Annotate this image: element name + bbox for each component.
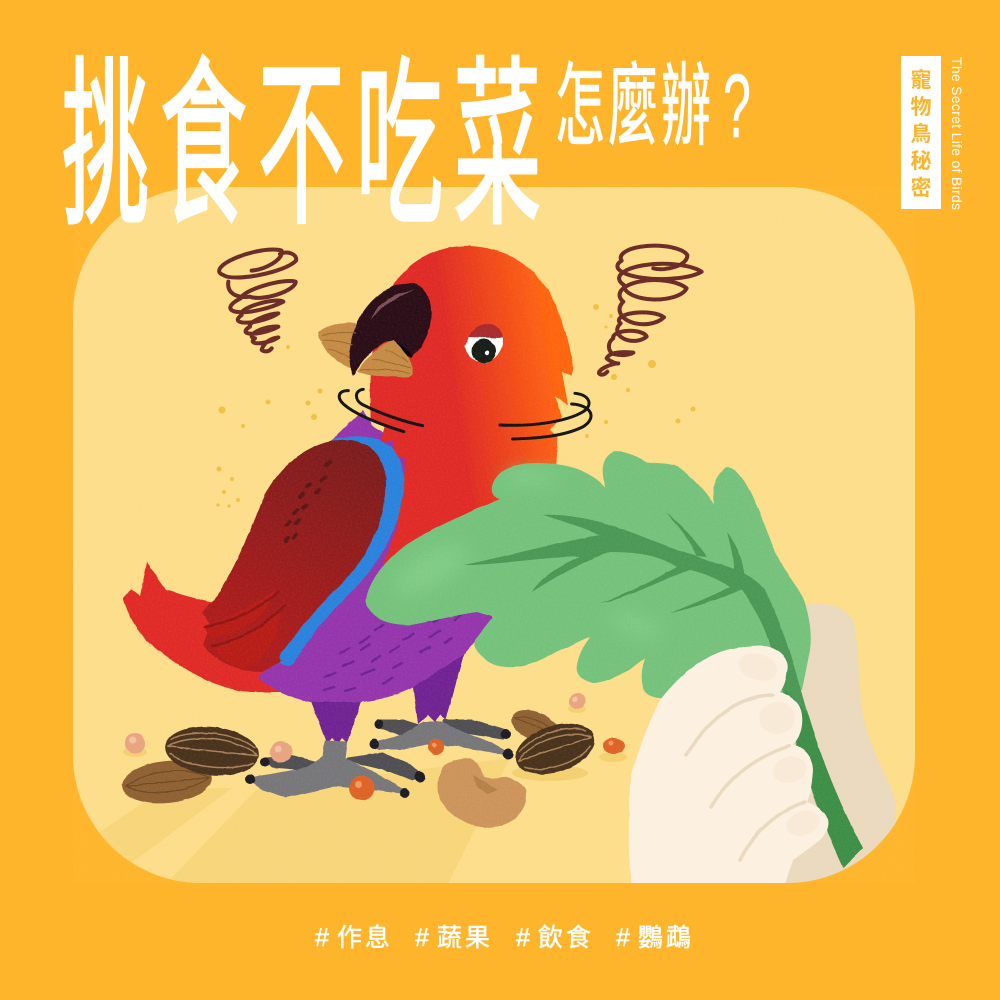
- hashtag: fruits and vegetables: #蔬果: [415, 924, 493, 952]
- wing spots: [286, 462, 330, 541]
- leaf highlights: [385, 469, 665, 644]
- beak highlight: [370, 290, 414, 320]
- finger creases: [686, 695, 805, 860]
- pink pea left: [125, 733, 145, 753]
- series tag box: 秘: [910, 150, 932, 173]
- series tag box: 鳥: [910, 123, 932, 146]
- spiral left: [219, 250, 296, 351]
- dark cocoa left: [165, 726, 259, 776]
- question mark: ?: [723, 57, 751, 157]
- head shake motion lines: [339, 389, 591, 439]
- mouth: [394, 341, 414, 358]
- spiral right: [599, 246, 702, 375]
- blue wing edge: [287, 445, 395, 657]
- nuts and seeds: [120, 693, 625, 827]
- parrot head and chest: [370, 246, 573, 565]
- orange pea under right foot: [428, 739, 444, 755]
- hashtag: rest: #作息: [315, 924, 393, 952]
- brown seed left: [122, 760, 212, 804]
- leaf stem and veins: [464, 512, 863, 868]
- hashtag: diet: #飲食: [516, 924, 594, 952]
- title: 挑食不吃菜: [62, 45, 552, 246]
- fingernails: [735, 649, 823, 840]
- series English name: The Secret Life of Birds: [949, 57, 965, 210]
- parrot legs: [310, 650, 465, 745]
- dark cocoa right: [515, 724, 594, 775]
- series tag box: 寵: [910, 69, 932, 92]
- panel: illustration background: [73, 187, 915, 883]
- parrot foot: right: [369, 720, 514, 760]
- cashew: [438, 758, 526, 827]
- spirals over the head: [219, 246, 702, 375]
- almond lines: [322, 332, 411, 373]
- orange pea right: [603, 738, 625, 754]
- parrot foot: left: [245, 742, 426, 798]
- wing feather lines: [205, 592, 285, 646]
- back of hand: [775, 604, 900, 890]
- parrot wing: [202, 440, 386, 672]
- hashtag: parrots: #鸚鵡: [616, 924, 694, 952]
- paper grain texture: [73, 187, 915, 883]
- parrot tail: [123, 562, 280, 692]
- belly feather marks: [324, 615, 461, 691]
- almond in beak, back half: [318, 323, 360, 368]
- subtitle characters: 怎麼辦: [555, 57, 714, 157]
- series tag box: [901, 56, 941, 209]
- pink pea right: [569, 693, 585, 709]
- orange pea under foot: [350, 776, 374, 800]
- light seed right: [511, 710, 556, 738]
- beak upper: [349, 283, 431, 376]
- hand with fingers: [629, 646, 828, 890]
- eye: [465, 324, 503, 363]
- leaf: [366, 452, 811, 720]
- wing feather bands: [204, 590, 280, 668]
- group: parrot: [123, 246, 573, 798]
- subtitle: [555, 57, 751, 157]
- parrot purple body: [258, 410, 493, 702]
- shadows beneath nuts: [123, 705, 627, 781]
- group: hand and leaf: [366, 452, 900, 890]
- pink pea middle: [270, 741, 292, 763]
- series tag box: 物: [910, 96, 932, 119]
- illustration scene: [73, 246, 900, 890]
- almond in beak, front half: [357, 340, 413, 377]
- scattered dust dots: [216, 304, 696, 508]
- hashtags: [315, 924, 694, 952]
- darker lower stem: [785, 690, 863, 868]
- floor shadows: [99, 758, 509, 883]
- series tag box: 密: [910, 176, 932, 200]
- blue wing tip: [285, 600, 335, 657]
